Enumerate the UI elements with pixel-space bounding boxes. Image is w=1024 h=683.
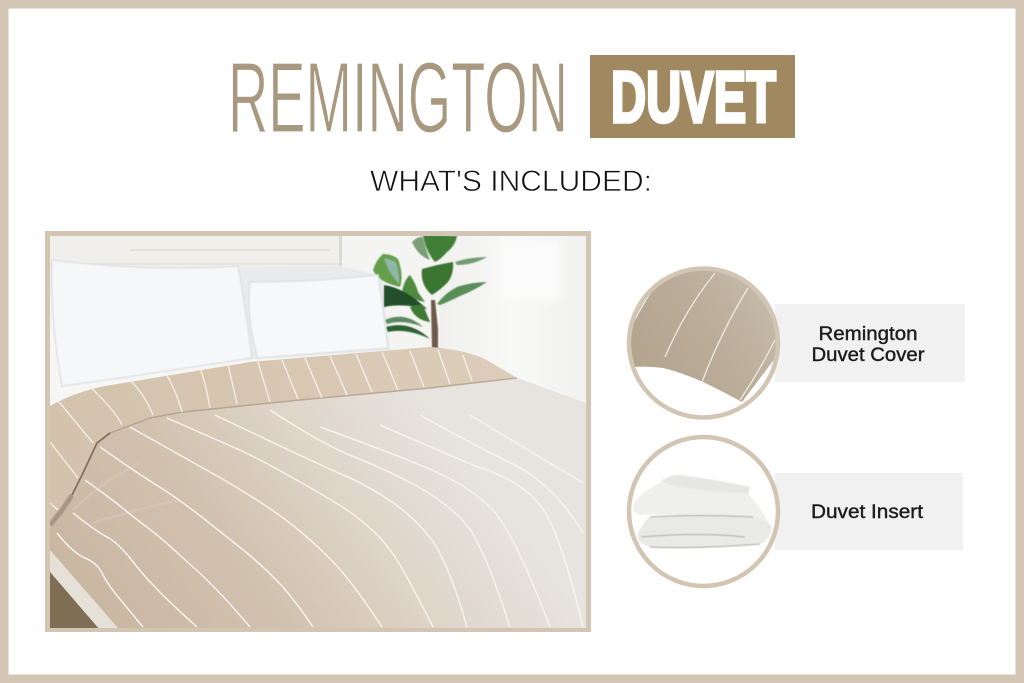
label bar: Duvet Insert: Duvet Insert (811, 502, 924, 523)
fold stripes (50, 350, 472, 510)
duvet fold (50, 347, 517, 523)
photo: bed with striped duvet (48, 234, 588, 630)
subtitle: WHAT'S INCLUDED: (370, 165, 652, 198)
title badge: Duvet: DUVET (611, 58, 776, 138)
label bar: Remington Duvet Cover: Duvet Cover (812, 345, 925, 366)
circle: duvet cover fabric swatch (625, 260, 785, 418)
body stripes (57, 410, 583, 627)
left pillow (52, 260, 252, 386)
title: Remington: REMINGTON (228, 42, 568, 154)
label bar: Duvet Insert (775, 473, 963, 550)
wrinkles (73, 463, 177, 523)
fold shadow line (50, 378, 517, 525)
circle: folded duvet insert (629, 437, 778, 586)
headboard (50, 236, 342, 296)
back pillows (240, 266, 390, 359)
duvet body (50, 377, 586, 628)
plant (373, 235, 487, 348)
rug (50, 572, 98, 628)
title badge: Duvet (590, 55, 795, 138)
label bar: Remington Duvet Cover: Remington (818, 324, 918, 345)
label bar: Remington Duvet Cover (775, 304, 965, 382)
right pillow (249, 275, 388, 358)
wall and curtain (340, 236, 586, 406)
bed frame (50, 550, 118, 628)
